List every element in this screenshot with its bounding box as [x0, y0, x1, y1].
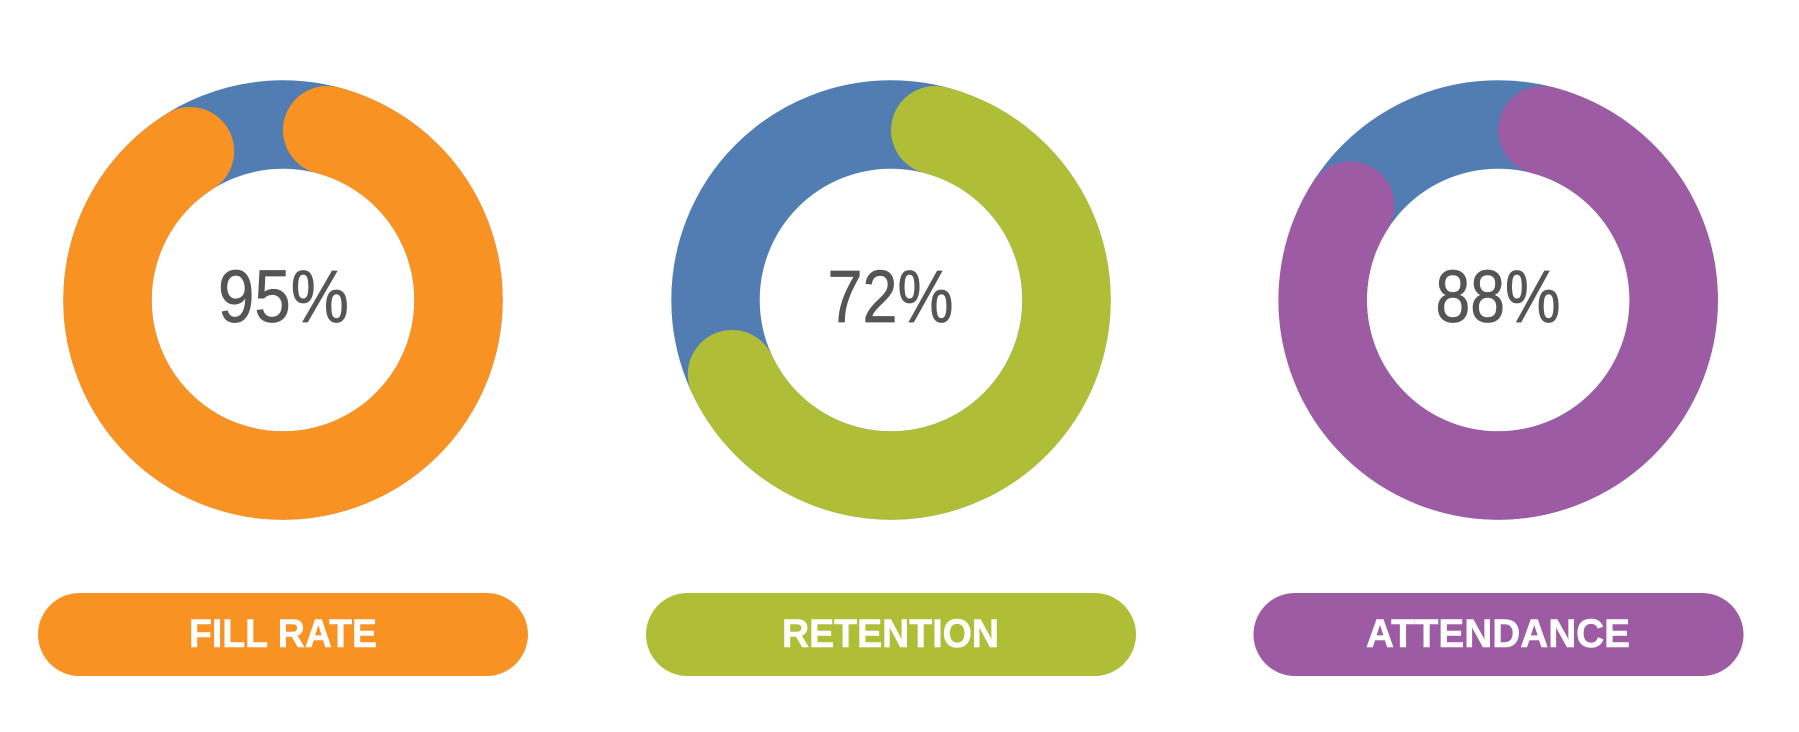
- donut: retention 72%: [716, 124, 1067, 476]
- label pill: retention: RETENTION: [782, 612, 999, 656]
- donut: fill rate 95%: [107, 124, 458, 476]
- donut: attendance 88%: [1323, 124, 1674, 476]
- panel: attendance: [1254, 124, 1744, 676]
- panel: retention: [646, 124, 1136, 676]
- label pill: fill rate: FILL RATE: [189, 612, 377, 656]
- value: 72%: 72%: [828, 255, 954, 338]
- value: 95%: 95%: [218, 255, 349, 338]
- label pill: attendance: [1254, 593, 1744, 676]
- value: 88%: 88%: [1436, 255, 1560, 338]
- label pill: attendance: ATTENDANCE: [1366, 612, 1630, 656]
- label pill: retention: [646, 593, 1136, 676]
- label pill: fill rate: [38, 593, 528, 676]
- panel: fill rate: [38, 124, 528, 676]
